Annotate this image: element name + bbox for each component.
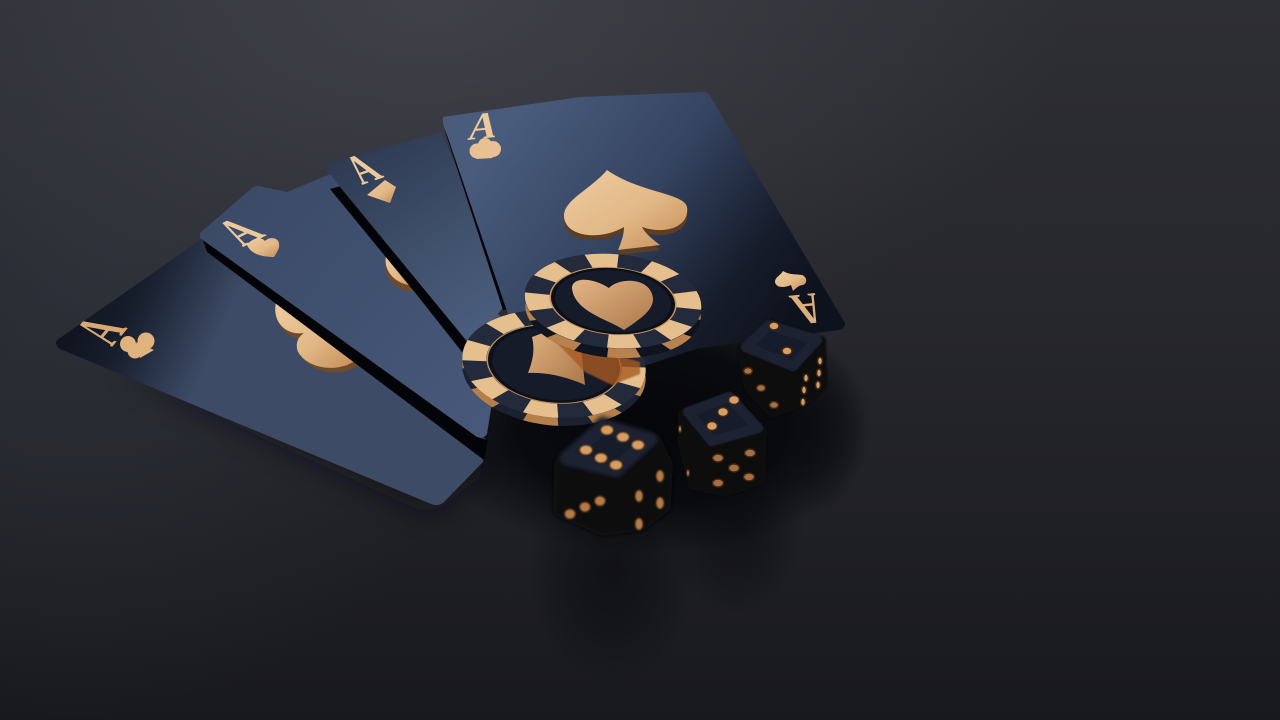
die: middle <box>678 396 762 492</box>
die: back right <box>742 322 822 413</box>
card: ace of spades <box>443 92 845 380</box>
card: ace of hearts <box>200 173 505 438</box>
shadow gap under second card <box>203 240 488 460</box>
chip edge <box>457 309 651 435</box>
pips <box>564 425 664 530</box>
corner letter A: A <box>334 145 393 194</box>
partial heart suit <box>385 253 418 292</box>
orange reflection under top chip <box>552 338 640 385</box>
corner club <box>470 138 501 159</box>
upper poker chip <box>520 246 706 365</box>
corner letter A: A <box>60 309 141 352</box>
inverted corner spade <box>775 271 806 291</box>
chip edge <box>521 257 705 365</box>
heart on chip <box>572 280 653 330</box>
corner letter A: A <box>466 104 500 149</box>
card: ace of clubs <box>56 238 487 505</box>
pips <box>744 322 822 408</box>
die: front <box>561 424 666 530</box>
large spade suit <box>564 170 687 255</box>
card: ace of diamonds <box>327 132 510 345</box>
diamond on chip <box>528 320 585 385</box>
lower poker chip <box>457 301 651 435</box>
pips <box>678 396 756 487</box>
chip face <box>520 246 706 356</box>
large club suit <box>275 299 358 373</box>
shadows and reflections on the table <box>120 295 875 680</box>
shadow gap under third card <box>330 186 470 352</box>
corner heart <box>247 238 279 257</box>
corner letter A: A <box>203 209 278 254</box>
inverted corner letter A: A <box>784 283 831 334</box>
chip face <box>457 301 651 427</box>
corner club <box>120 332 154 358</box>
shadow gap under fourth card <box>444 128 507 310</box>
corner diamond <box>367 180 396 203</box>
